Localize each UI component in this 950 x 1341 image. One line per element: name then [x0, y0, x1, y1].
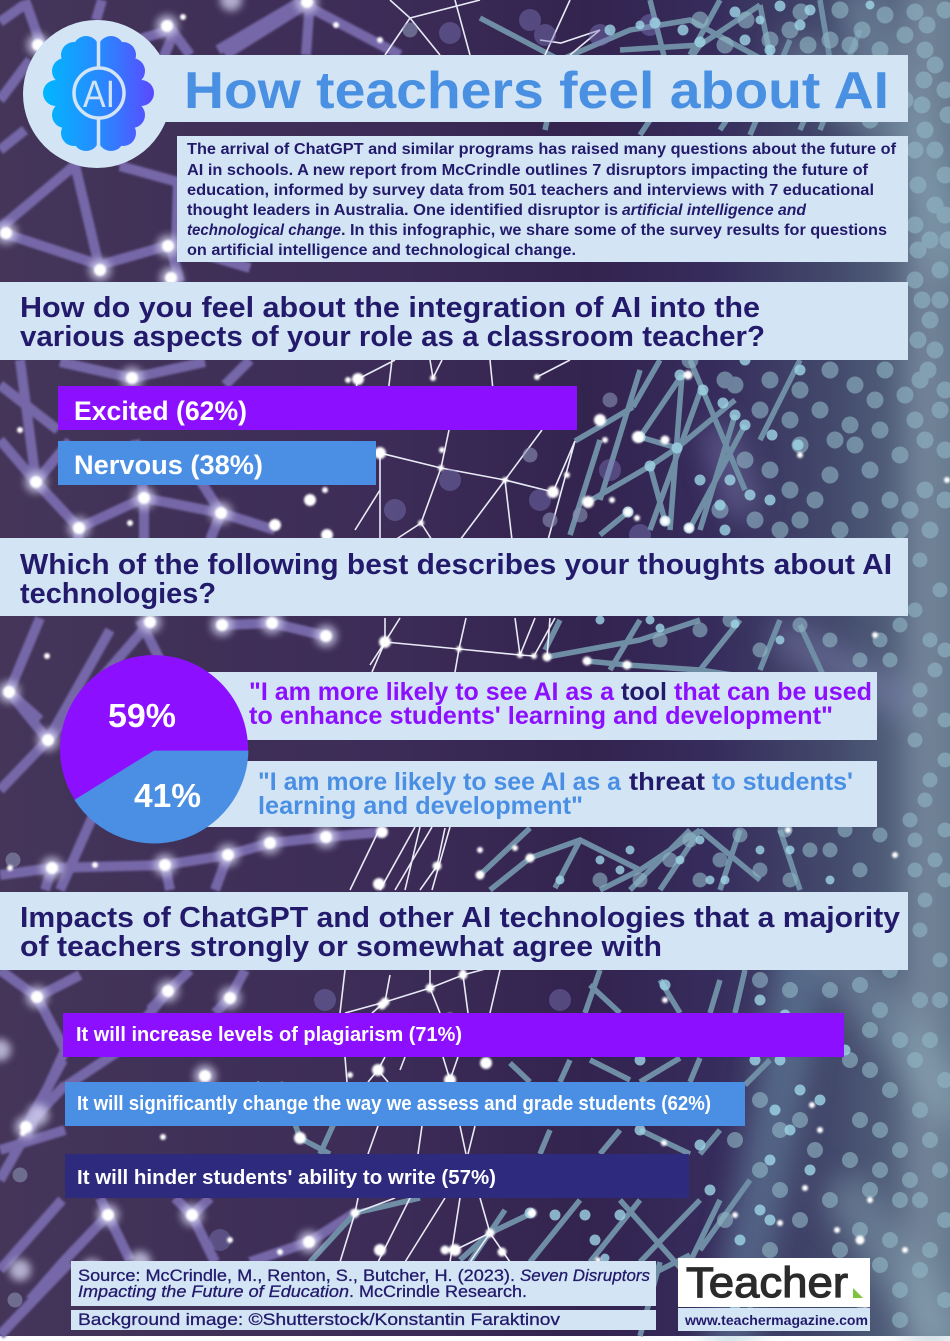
panel: introduction: AI in schools. A new report from McCrindle outlines 7 disruptors impacting the future of — [187, 162, 869, 179]
bar: excited: Excited (62%) — [74, 396, 247, 426]
icon: AI brain badge: AI — [83, 74, 115, 116]
panel: introduction: . In this infographic, we share some of the survey results for questions — [341, 222, 887, 239]
title: How teachers feel about AI — [184, 62, 889, 120]
pie chart: tool versus threat: 41% — [134, 777, 201, 814]
bar: writing — [65, 1154, 689, 1198]
bar: assessment — [65, 1082, 745, 1126]
panel: introduction: thought leaders in Australia. One identified disruptor is — [187, 202, 618, 219]
source note: Seven Disruptors — [520, 1266, 650, 1285]
website address — [678, 1308, 870, 1331]
panel: introduction: artificial intelligence and — [622, 202, 807, 219]
panel: title banner — [160, 55, 908, 122]
callout: AI as a tool: that can be used — [674, 678, 872, 706]
panel: introduction: education, informed by survey data from 501 teachers and interviews with 7 educational — [187, 182, 874, 199]
callout: AI as a threat: to students' — [712, 768, 853, 796]
source note — [71, 1261, 656, 1306]
callout: AI as a threat: threat — [629, 768, 706, 796]
callout: AI as a threat: learning and development" — [258, 792, 583, 820]
callout: AI as a tool: tool — [621, 678, 667, 706]
source note: Source: McCrindle, M., Renton, S., Butcher, H. (2023). — [78, 1266, 515, 1285]
website address: www.teachermagazine.com — [684, 1312, 868, 1328]
image credit — [71, 1310, 656, 1330]
heading: question two — [0, 538, 908, 616]
bar: assessment: It will significantly change the way we assess and grade students (62%) — [77, 1093, 711, 1115]
source note: . McCrindle Research. — [349, 1282, 527, 1301]
callout: AI as a threat: "I am more likely to see AI as a — [258, 768, 622, 796]
pie chart: tool versus threat — [60, 655, 248, 843]
bar: nervous: Nervous (38%) — [74, 450, 263, 480]
bar: plagiarism: It will increase levels of plagiarism (71%) — [76, 1024, 462, 1046]
bar chart: impacts — [63, 1013, 844, 1198]
heading: impacts: of teachers strongly or somewhat agree with — [20, 931, 662, 963]
heading: impacts: Impacts of ChatGPT and other AI technologies that a majority — [20, 902, 900, 934]
panel: introduction: on artificial intelligence and technological change. — [187, 242, 576, 259]
panel: introduction: The arrival of ChatGPT and similar programs has raised many questions about the future of — [187, 141, 897, 158]
heading: impacts — [0, 892, 908, 970]
image credit: Background image: ©Shutterstock/Konstantin Faraktinov — [78, 1310, 561, 1329]
panel: introduction: technological change — [187, 222, 341, 239]
callout: AI as a tool: to enhance students' learning and development" — [249, 702, 833, 730]
bar: excited — [58, 386, 577, 430]
pie chart: tool versus threat: 59% — [108, 697, 176, 734]
source note: Impacting the Future of Education — [78, 1282, 349, 1301]
callout: AI as a threat — [207, 761, 877, 827]
icon: AI brain badge — [23, 20, 171, 168]
panel: introduction — [177, 136, 908, 262]
bar: nervous — [58, 441, 376, 485]
heading: question one — [0, 282, 908, 360]
callout: AI as a tool: "I am more likely to see AI as a — [249, 678, 615, 706]
bar chart: excited versus nervous — [58, 386, 577, 485]
heading: question one: various aspects of your role as a classroom teacher? — [20, 321, 765, 353]
heading: question two: Which of the following best describes your thoughts about AI — [20, 549, 892, 581]
heading: question two: technologies? — [20, 578, 216, 610]
heading: question one: How do you feel about the integration of AI into the — [20, 292, 760, 324]
logo: Teacher: Teacher — [686, 1259, 848, 1307]
callout: AI as a tool — [207, 672, 877, 740]
bar: plagiarism — [63, 1013, 844, 1057]
bar: writing: It will hinder students' ability to write (57%) — [77, 1167, 496, 1189]
